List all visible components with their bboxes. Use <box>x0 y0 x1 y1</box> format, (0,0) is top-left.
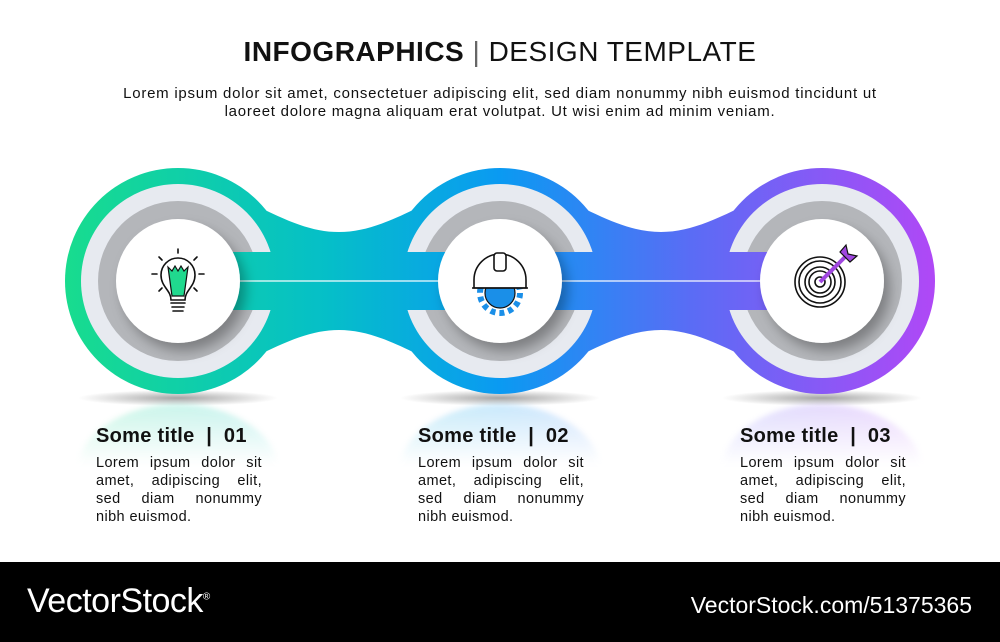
subtitle: laoreet dolore magna aliquam erat volutpat. Ut wisi enim ad minim veniam. <box>225 102 775 120</box>
item 01 <box>96 425 262 525</box>
icon: lightbulb <box>152 249 204 311</box>
item 01: Some title | 01 <box>96 425 247 447</box>
item 01: amet, adipiscing elit, <box>96 473 262 489</box>
item 02: sed diam nonummy <box>418 491 584 507</box>
item 03 <box>740 425 906 525</box>
subtitle: Lorem ipsum dolor sit amet, consectetuer adipiscing elit, sed diam nonummy nibh euismod tincidunt ut <box>123 85 877 102</box>
rings <box>81 184 919 378</box>
item 02: Lorem ipsum dolor sit <box>418 455 584 471</box>
footer <box>0 562 1000 642</box>
item 03: Lorem ipsum dolor sit <box>740 455 906 471</box>
item 01: nibh euismod. <box>96 509 191 525</box>
title: INFOGRAPHICS | DESIGN TEMPLATE <box>244 36 756 67</box>
item 02: nibh euismod. <box>418 509 513 525</box>
item 03: amet, adipiscing elit, <box>740 473 906 489</box>
icon: helmet gear <box>472 253 528 313</box>
item 03: nibh euismod. <box>740 509 835 525</box>
reflections <box>60 404 940 560</box>
footer: VectorStock® <box>27 582 210 620</box>
item 01: Lorem ipsum dolor sit <box>96 455 262 471</box>
shadows <box>78 390 922 406</box>
item 03: Some title | 03 <box>740 425 891 447</box>
item 02: amet, adipiscing elit, <box>418 473 584 489</box>
icon: target <box>795 245 857 307</box>
white circles <box>116 219 884 343</box>
item 02 <box>418 425 584 525</box>
item 02: Some title | 02 <box>418 425 569 447</box>
item 03: sed diam nonummy <box>740 491 906 507</box>
gradient chain shape <box>65 168 935 394</box>
subtitle <box>123 85 877 120</box>
item 01: sed diam nonummy <box>96 491 262 507</box>
footer: VectorStock.com/51375365 <box>691 592 972 618</box>
